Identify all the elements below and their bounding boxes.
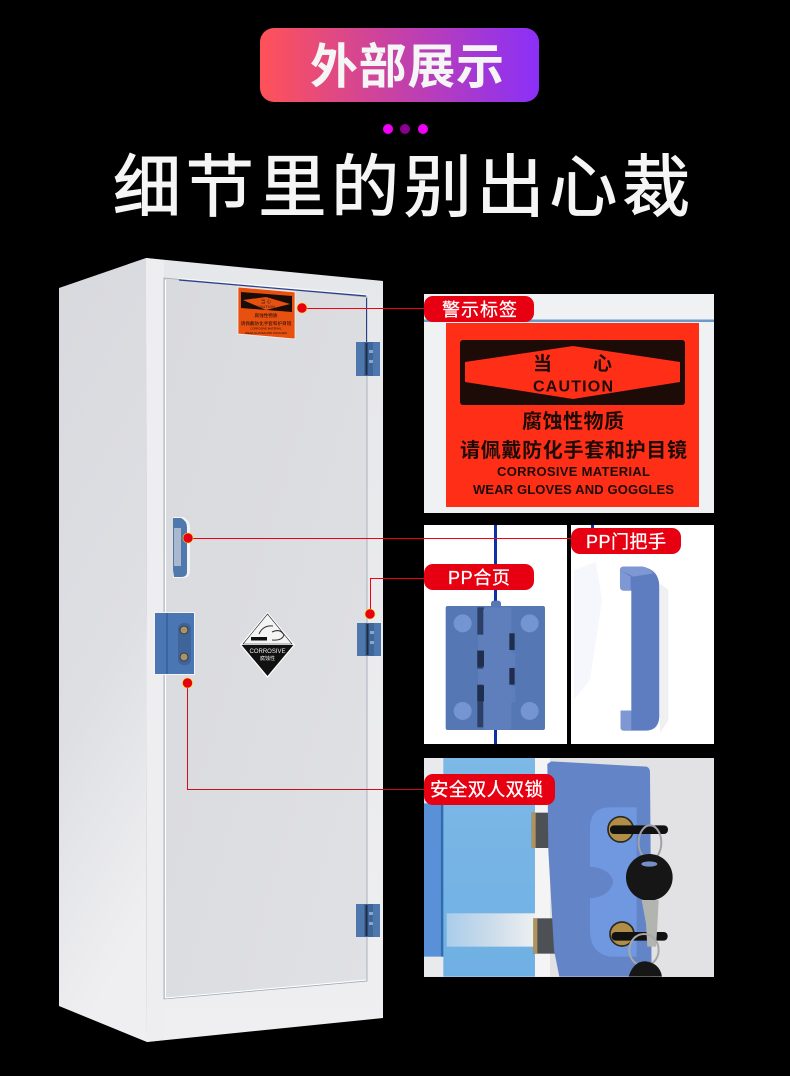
panel: warning label detail: 请佩戴防化手套和护目镜 [460, 438, 687, 462]
three dots [383, 124, 428, 134]
panel: warning label detail: CAUTION [533, 378, 613, 396]
panel: warning label detail [424, 294, 714, 513]
leader: warning label [297, 303, 424, 313]
middle hinge [357, 623, 381, 656]
leader: hinge [365, 578, 424, 619]
panel: warning label detail: 当 [533, 353, 552, 375]
heading badge [260, 28, 539, 102]
warning label on door: 当 心 [261, 298, 272, 305]
callout: lock [424, 774, 555, 805]
corrosive diamond [240, 612, 295, 678]
callout: lock: 安全双人双锁 [430, 779, 543, 800]
callout: hinge [424, 564, 534, 590]
panel: warning label detail: 腐蚀性物质 [522, 410, 624, 433]
panel: handle detail [571, 525, 714, 744]
bottom hinge [356, 904, 380, 937]
callout: warning label [424, 296, 534, 322]
cabinet door [164, 278, 367, 999]
cabinet side [59, 258, 147, 1042]
handle photo [620, 567, 668, 733]
heading badge: 外部展示 [310, 41, 504, 94]
top hinge [356, 342, 380, 376]
panel: lock detail [424, 758, 714, 977]
callout: handle [571, 528, 681, 554]
cabinet [59, 258, 383, 1042]
panel: warning label detail: WEAR GLOVES AND GOGGLES [473, 482, 674, 497]
hinge photo [446, 601, 545, 730]
callout: hinge: PP合页 [448, 568, 510, 588]
warning label on door: 请佩戴防化手套和护目镜 [241, 320, 292, 327]
callout: warning label: 警示标签 [442, 300, 517, 320]
cabinet front frame [146, 258, 383, 1042]
warning label on door: CAUTION [257, 304, 275, 309]
warning label on door [238, 287, 295, 339]
door handle [173, 517, 190, 578]
warning label on door: CORROSIVE MATERIAL [250, 326, 282, 330]
lock photo [424, 758, 673, 977]
cabinet corner strip [146, 258, 164, 1042]
leader: door handle [183, 533, 572, 543]
callout lines and dots [182, 303, 572, 790]
leader: lock [182, 678, 424, 790]
panel: warning label detail: CORROSIVE MATERIAL [497, 464, 650, 479]
callout: handle: PP门把手 [586, 532, 666, 552]
warning label on door: 腐蚀性物质 [255, 312, 278, 319]
panel: warning label detail: 心 [593, 353, 612, 375]
warning label on door: WEAR GLOVES AND GOGGLES [245, 331, 287, 335]
corrosive diamond: 腐蚀性 [260, 655, 275, 662]
lock [154, 612, 195, 675]
corrosive diamond: CORROSIVE [249, 649, 286, 655]
title: 细节里的别出心裁 [113, 150, 690, 226]
panel: hinge detail [424, 525, 567, 744]
